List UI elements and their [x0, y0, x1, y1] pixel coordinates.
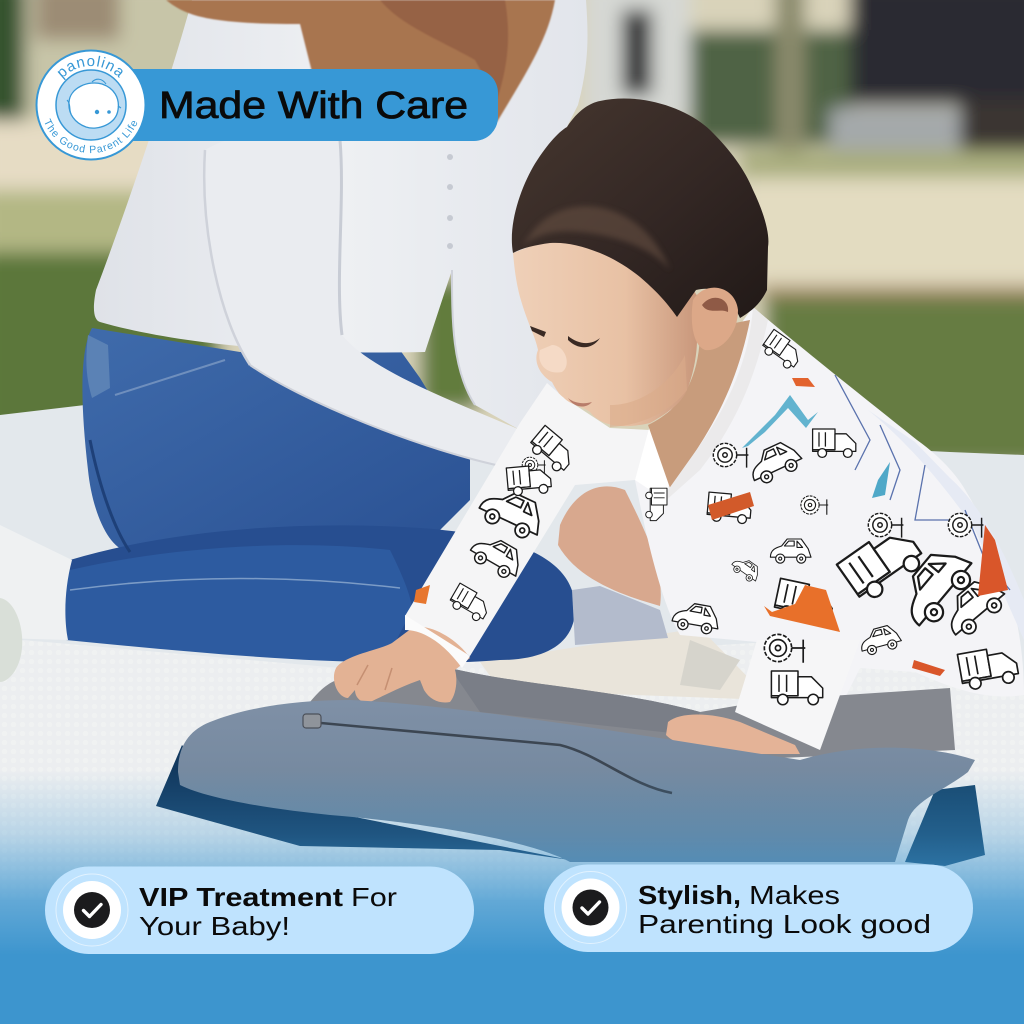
callout: vip treatment: VIP Treatment [139, 882, 343, 912]
baby's foot sock behind [572, 586, 668, 645]
travel cushion: grey back panel [310, 668, 955, 758]
baby: head [512, 98, 768, 427]
callout: stylish: Stylish, [638, 880, 741, 910]
icon: check mark [554, 872, 626, 944]
callout: stylish: Makes [749, 880, 840, 910]
glass bottle at left edge [0, 598, 22, 682]
header banner: made with care: Made With Care [159, 85, 468, 127]
travel cushion: blue front roll with zipper [156, 700, 985, 866]
woman: jeans [64, 328, 575, 663]
logo badge: panolina: The Good Parent Life [44, 118, 138, 154]
ear [692, 288, 738, 350]
woman: white sock [0, 525, 72, 640]
vehicle print [448, 329, 1020, 691]
sleeper body [635, 307, 1024, 748]
header banner: made with care [100, 69, 498, 141]
solid blue footer [0, 955, 1024, 1024]
logo badge: panolina: panolina [58, 56, 122, 80]
neck [648, 320, 750, 488]
baby: right forearm and hand [666, 578, 860, 754]
sleeve [405, 383, 650, 656]
baby: left hand on cushion [334, 615, 470, 702]
callout: vip treatment: Your Baby! [139, 911, 290, 941]
face [513, 235, 700, 426]
icon: baby face [67, 79, 121, 128]
woman: long auburn hair [166, 0, 555, 122]
undershirt [635, 425, 672, 500]
callout: vip treatment: For [351, 882, 397, 912]
orange and teal accents [708, 492, 754, 520]
hair [512, 98, 768, 318]
baby: sleeper and cars [405, 307, 1024, 748]
callout: stylish [544, 864, 973, 952]
callout: stylish: Parenting Look good [638, 909, 931, 939]
logo badge: panolina [36, 50, 144, 160]
blue far side print [835, 375, 1010, 590]
woman: hand behind baby [558, 486, 661, 606]
white blanket [0, 405, 1024, 1024]
callout: vip treatment [45, 866, 474, 954]
blue gradient fade at bottom [0, 770, 1024, 955]
collar band [663, 307, 768, 503]
icon: check [56, 874, 128, 946]
woman: white long sleeve shirt [94, 0, 588, 468]
